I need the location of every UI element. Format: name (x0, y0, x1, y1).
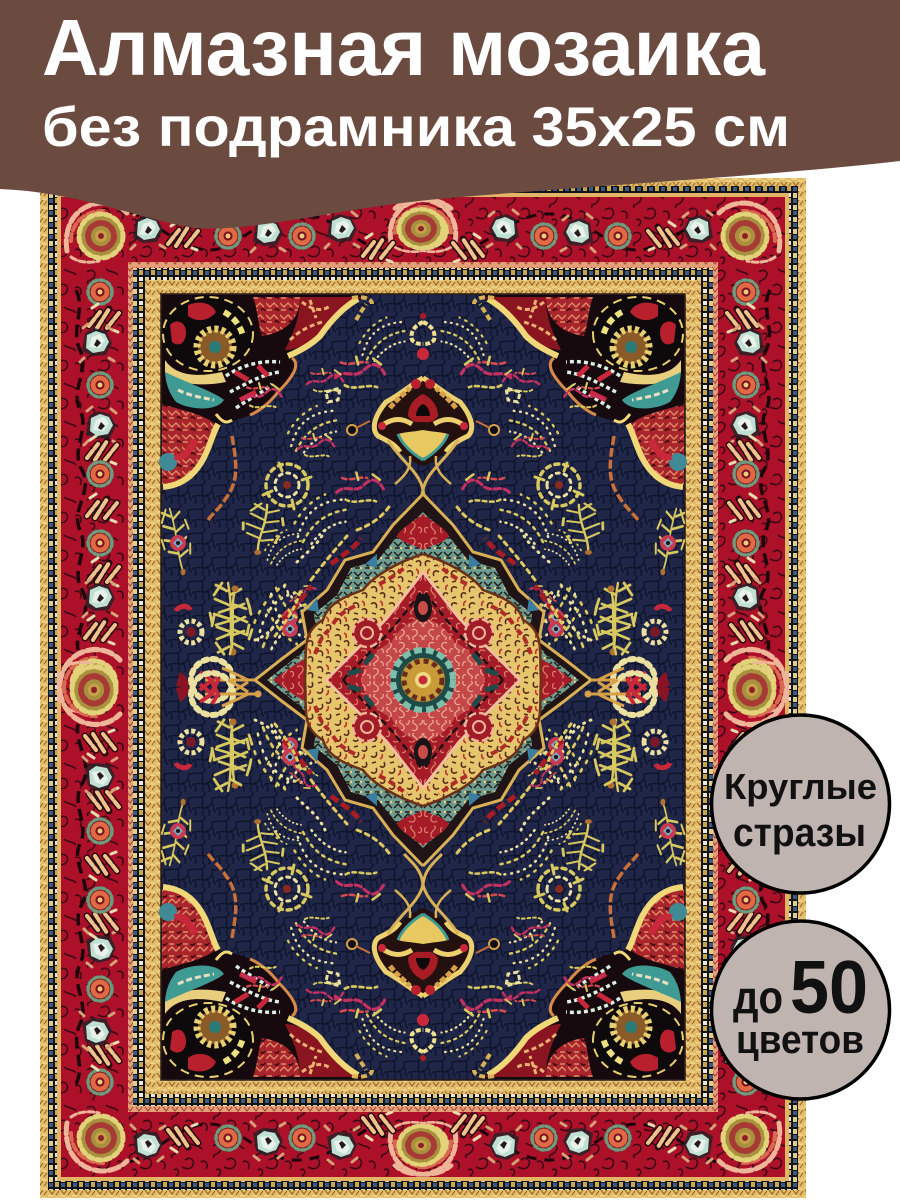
badge: round rhinestones (712, 715, 890, 893)
carpet artwork (40, 178, 806, 1198)
subtitle: без подрамника 35х25 см (42, 95, 790, 158)
badge: round rhinestones: стразы (733, 811, 866, 855)
top-right quadrant motifs (395, 200, 787, 789)
carpet beaded band (48, 186, 798, 1190)
badge: up to 50 colours: 50 (790, 945, 868, 1029)
title: Алмазная мозаика (42, 3, 765, 92)
navy central field (161, 294, 685, 1080)
red floral border (61, 197, 785, 1177)
bottom-left quadrant motifs (59, 585, 451, 1174)
bottom-right quadrant motifs (395, 585, 787, 1174)
inner gold frame (145, 280, 701, 1094)
badge: round rhinestones: Круглые (724, 766, 877, 807)
top-left quadrant motifs (59, 200, 451, 789)
inner beaded frame (133, 268, 713, 1106)
inner pink frame (128, 262, 718, 1112)
central diamond medallion (255, 494, 591, 866)
medallion centre rosette (391, 648, 455, 712)
badge: up to 50 colours (712, 921, 890, 1099)
carpet outer gold band (40, 178, 806, 1198)
badge: up to 50 colours: до (733, 971, 783, 1023)
brown header banner (0, 0, 900, 228)
badge: up to 50 colours: цветов (736, 1018, 864, 1062)
carpet thin gold band (57, 193, 789, 1181)
